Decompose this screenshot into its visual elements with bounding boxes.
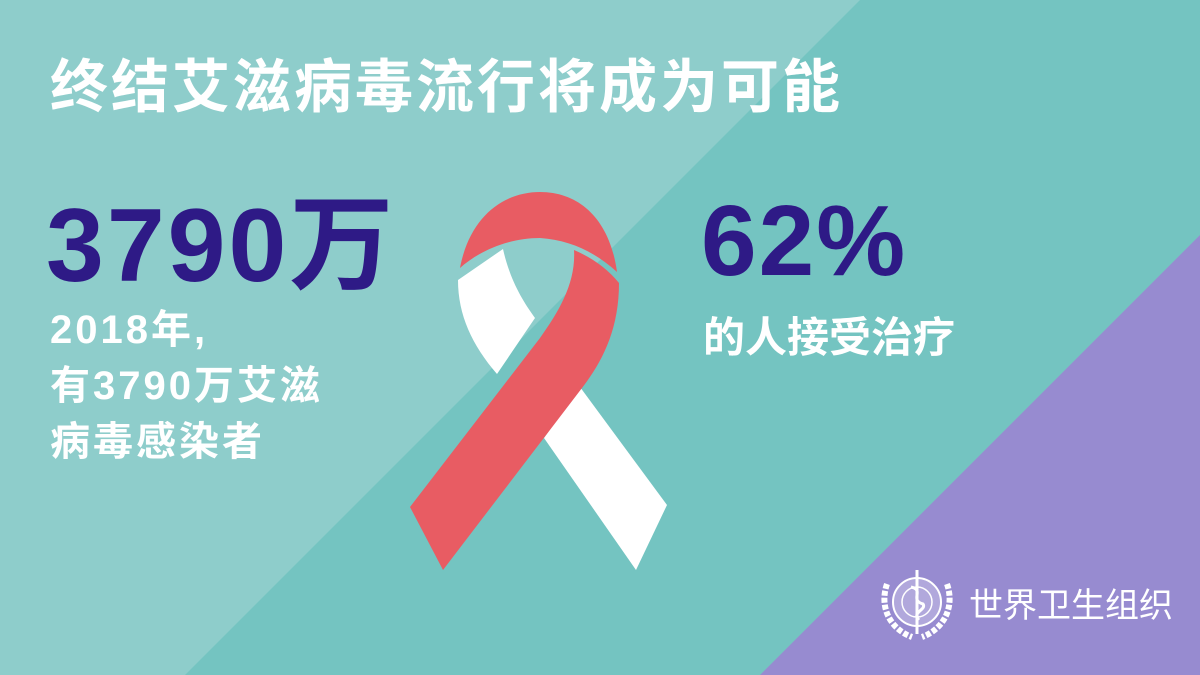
text: infections [50, 308, 323, 464]
text: treatment: 的人接受治疗 [703, 314, 955, 361]
title: 终结艾滋病毒流行将成为可能 [50, 55, 843, 120]
logo: WHO [881, 570, 1173, 640]
stat: 62%: 62% [701, 185, 907, 297]
text: infections: 2018年, [50, 308, 208, 352]
icon: WHO emblem [881, 570, 953, 640]
text: WHO name: 世界卫生组织 [969, 587, 1173, 625]
text: infections: 病毒感染者 [50, 420, 265, 464]
text: infections: 有3790万艾滋 [50, 364, 323, 408]
stat: 3790万: 3790万 [46, 188, 396, 304]
